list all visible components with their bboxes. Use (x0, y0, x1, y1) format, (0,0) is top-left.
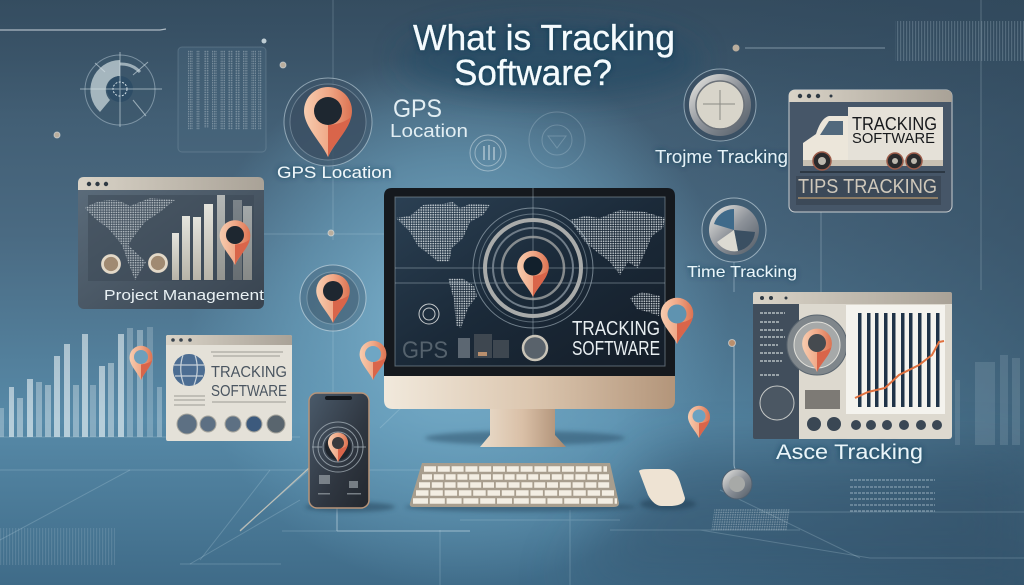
text block: faint caption lines (850, 480, 935, 511)
icon: faint ghost circle (529, 112, 585, 168)
dotted world map (85, 198, 175, 280)
screen label: TRACKING (572, 318, 660, 340)
screen (395, 197, 665, 366)
decoration: top-right rule with node (732, 44, 885, 52)
icon: pin on monitor edge (360, 341, 386, 380)
card label (211, 364, 287, 400)
decoration: top-left rule (0, 29, 166, 30)
mouse (639, 469, 696, 510)
bezel (384, 188, 675, 376)
title: What is Tracking (413, 17, 675, 58)
card label: SOFTWARE (211, 383, 287, 400)
title (413, 17, 675, 93)
icon: top-left radial dial (80, 52, 162, 127)
globe (173, 354, 205, 386)
label: tips tracking: TIPS TRACKING (798, 176, 937, 198)
chart: faint dotted top panel (178, 38, 266, 152)
location pin (220, 220, 250, 265)
world map (396, 202, 665, 328)
decoration: bottom hatch (0, 509, 789, 565)
icon: metal knob (722, 469, 752, 499)
bottom dial (523, 336, 547, 360)
phone (305, 393, 395, 512)
thumbnails (177, 414, 285, 434)
screen label (572, 318, 660, 360)
small dials (102, 254, 166, 272)
panel: tracking software card (166, 335, 292, 441)
phone pin (328, 433, 348, 462)
thumbnails (458, 334, 509, 358)
truck label: TRACKING (852, 114, 937, 134)
bar chart (846, 305, 945, 414)
panel: asset tracking dashboard (753, 292, 952, 439)
keyboard (405, 463, 635, 512)
chart: right faded bars (955, 355, 1020, 445)
radar rings (473, 208, 593, 328)
truck (803, 107, 943, 170)
bars (172, 195, 252, 280)
icon: small pin below (688, 406, 710, 438)
icon: compass dial (684, 69, 756, 141)
icon: mid pin with rings (300, 265, 366, 331)
monitor (384, 188, 675, 447)
small dial (419, 304, 439, 324)
stand (480, 408, 566, 447)
phone glyphs (318, 475, 361, 494)
panel: project management (78, 177, 265, 309)
label: GPS Location secondary: Location (390, 121, 468, 141)
icon: faint ring (470, 135, 506, 171)
label: Asce Tracking: Asce Tracking (776, 441, 923, 464)
icons: small floating nodes (54, 62, 736, 346)
label: GPS Location secondary: GPS (393, 95, 442, 123)
title glow (400, 22, 700, 98)
central pin (517, 251, 549, 297)
icon: time dial (702, 198, 766, 262)
chart: left bar chart (0, 327, 162, 437)
card label: TRACKING (211, 364, 287, 381)
phone rings (312, 422, 366, 472)
chin (384, 370, 675, 409)
truck label (852, 114, 937, 147)
label: Trojme Tracking: Trojme Tracking (655, 147, 788, 167)
icon: pin right of monitor (661, 298, 693, 344)
decoration: top-right hatch (895, 21, 1024, 61)
centre dial with pin (787, 315, 847, 375)
truck label: SOFTWARE (852, 130, 935, 147)
icon: large GPS pin with rings (284, 78, 372, 166)
sidebar (753, 304, 799, 439)
panel: truck tracking (789, 90, 952, 212)
label: Time Tracking: Time Tracking (687, 264, 797, 281)
label: GPS Location: GPS Location (277, 163, 392, 182)
title: Software? (454, 52, 612, 93)
label: GPS Location secondary (390, 95, 468, 141)
faint GPS label: GPS (402, 337, 448, 364)
label: Project Management (104, 287, 265, 304)
icon: small pin left (129, 346, 153, 380)
screen label: SOFTWARE (572, 338, 660, 360)
